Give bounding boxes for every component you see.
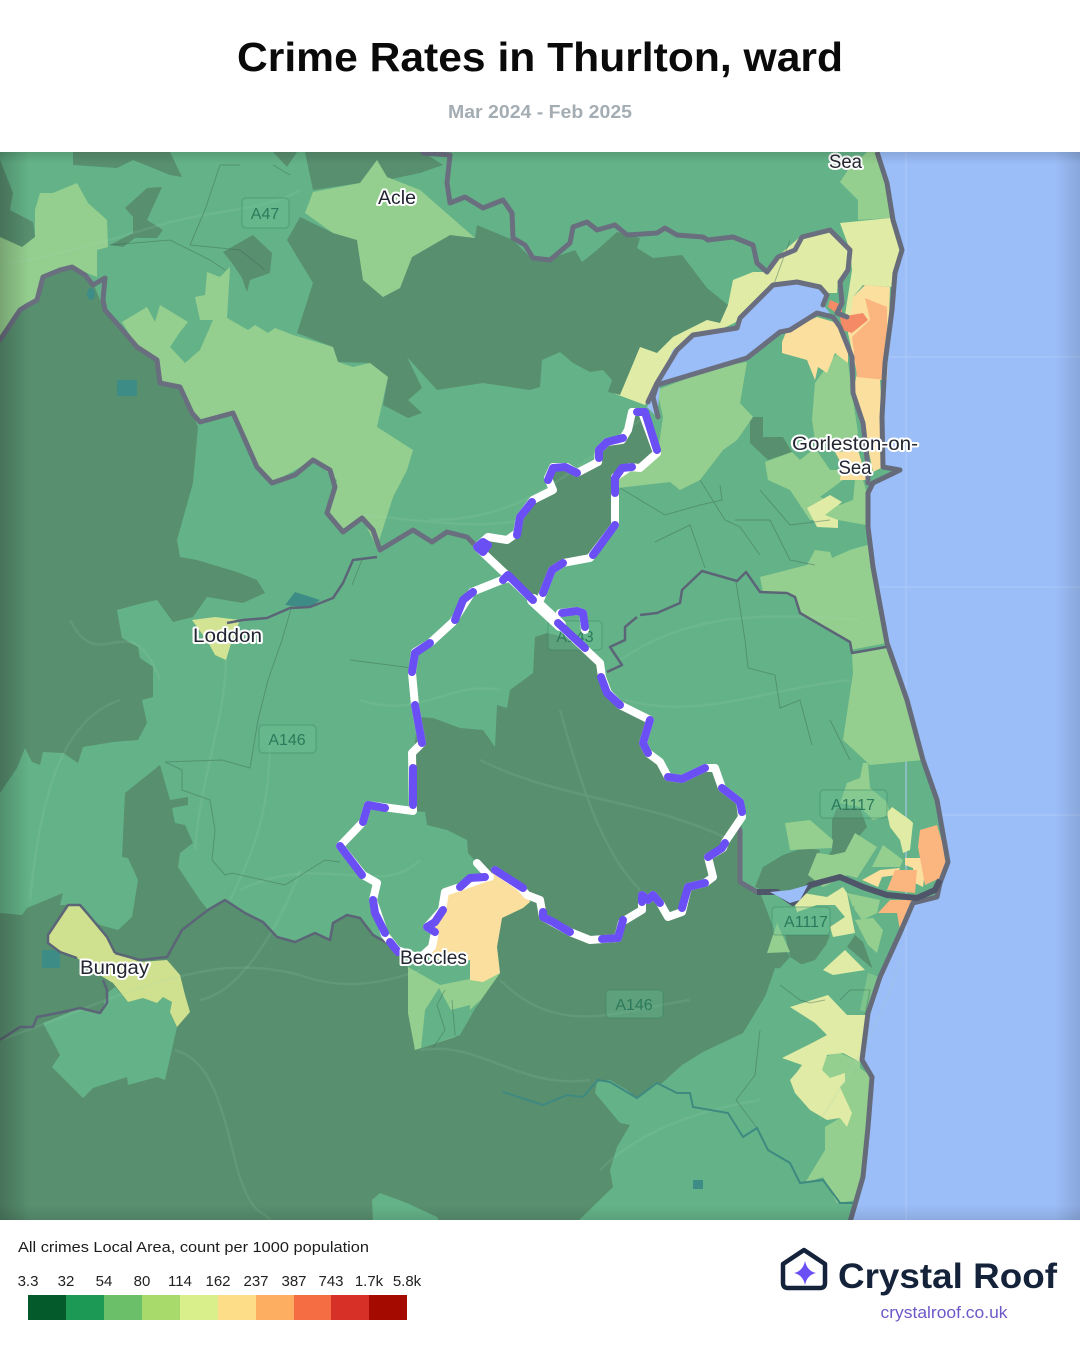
place labels: Loddon — [193, 626, 262, 647]
ward boundary: purple dashes — [340, 412, 742, 952]
road labels: A146 — [615, 997, 653, 1014]
legend colour scale — [28, 1295, 407, 1320]
choropleth: yellow areas — [613, 218, 913, 1127]
place labels: Sea — [829, 152, 862, 173]
place labels: Sea — [838, 458, 872, 479]
place labels: Gorleston-on- — [792, 434, 918, 455]
choropleth: light green areas — [0, 152, 923, 1203]
brand url: crystalroof.co.uk — [880, 1304, 1008, 1322]
Breydon Water — [647, 282, 830, 417]
dark: southern area — [0, 765, 790, 1222]
dark: lower lobe of ward — [413, 633, 742, 940]
legend tick labels: 3.3 — [18, 1273, 38, 1290]
road labels: A47 — [251, 206, 279, 223]
faint road network — [0, 190, 900, 1220]
legend tick labels: 162 — [205, 1273, 231, 1290]
sea grid lines — [880, 152, 1080, 1220]
Loddon — [192, 617, 240, 660]
peach and orange areas — [782, 285, 925, 887]
legend — [18, 1239, 422, 1320]
place labels: Acle — [378, 188, 416, 209]
legend tick labels: 5.8k — [393, 1273, 422, 1290]
road labels: A1117 — [784, 914, 828, 931]
water bodies: small lakes — [42, 288, 703, 1189]
icon: house with star — [783, 1250, 825, 1288]
legend tick labels: 743 — [318, 1273, 344, 1290]
legend title: All crimes Local Area, count per 1000 population — [18, 1239, 369, 1256]
admin boundaries — [110, 165, 870, 1128]
legend tick labels: 387 — [281, 1273, 307, 1290]
coastline — [850, 152, 948, 1222]
title: Crime Rates in Thurlton, ward — [237, 34, 843, 80]
legend tick labels — [18, 1273, 422, 1290]
place labels: Beccles — [400, 948, 467, 969]
ward boundary: white casing — [340, 412, 742, 958]
legend tick labels: 114 — [168, 1273, 192, 1290]
southern teal river — [503, 1080, 853, 1203]
choropleth: dark low-crime areas — [0, 152, 872, 1222]
road labels: A146 — [268, 732, 306, 749]
Lake Lothing channel — [757, 877, 940, 903]
place labels: Bungay — [80, 958, 150, 979]
legend tick labels: 32 — [58, 1273, 74, 1290]
legend tick labels: 237 — [243, 1273, 269, 1290]
dark: upper lobe of ward — [488, 416, 652, 596]
Bungay — [48, 905, 190, 1027]
road labels: A143 — [556, 629, 594, 646]
brand name: Crystal Roof — [838, 1257, 1057, 1296]
brand logo — [783, 1250, 1057, 1322]
choropleth: mid areas on dark — [43, 968, 780, 1220]
map vignette — [0, 152, 1080, 1220]
road labels — [251, 206, 875, 1014]
road shields — [242, 198, 887, 1018]
mid green inside light Beccles south — [421, 988, 480, 1048]
Beccles peach — [430, 868, 530, 982]
road labels: A1117 — [831, 797, 875, 814]
rivers: major grey channels — [0, 153, 868, 892]
legend tick labels: 1.7k — [355, 1273, 384, 1290]
land base — [0, 152, 948, 1222]
subtitle: date range: Mar 2024 - Feb 2025 — [448, 101, 632, 122]
place labels — [80, 152, 918, 979]
legend tick labels: 54 — [96, 1273, 112, 1290]
thin grey rivers — [0, 557, 886, 1040]
map panel — [0, 152, 1080, 1222]
legend tick labels: 80 — [134, 1273, 150, 1290]
